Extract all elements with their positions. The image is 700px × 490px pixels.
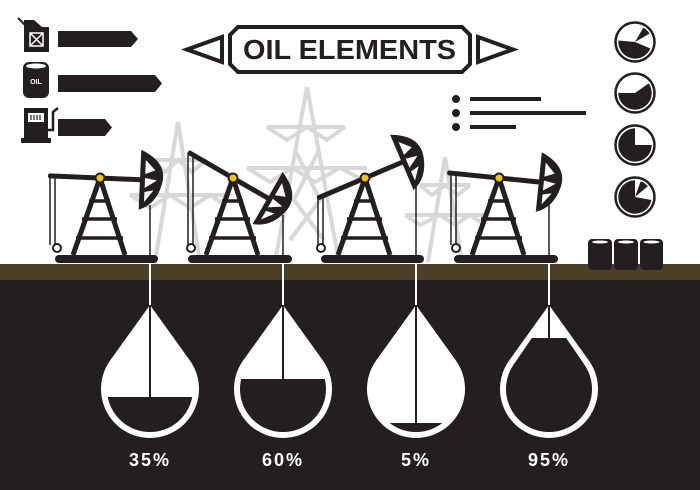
underground [0,280,700,490]
arrow left [187,37,222,62]
ground band [0,264,700,280]
pumpjack 3 [305,126,435,263]
left icon: oil barrel [23,62,49,98]
title banner [230,27,470,72]
bar 1 [58,31,138,47]
drop 5% [367,305,465,470]
drop 35%: 35% [129,450,171,470]
arrow right [478,37,513,62]
rods below ground [150,263,549,306]
pumpjack 2 [173,126,303,263]
drop 95% [500,305,598,470]
drop 95%: 95% [528,450,570,470]
drop 60% [234,305,332,470]
bar 2 [58,75,162,92]
title banner: OIL ELEMENTS [243,34,456,65]
pumpjack 1 [47,146,164,263]
drop 5%: 5% [401,450,431,470]
pie icons [616,22,654,216]
oil barrels [588,239,663,270]
background towers [130,87,485,262]
bullet list [452,95,586,131]
bar 3 [58,119,112,136]
drop 60%: 60% [262,450,304,470]
pumpjack 4 [444,143,565,263]
drop 35% [101,305,199,470]
left icon: jerrycan [18,18,49,52]
left icon: oil barrel: OIL [30,79,43,86]
left icon: fuel pump [21,108,58,143]
